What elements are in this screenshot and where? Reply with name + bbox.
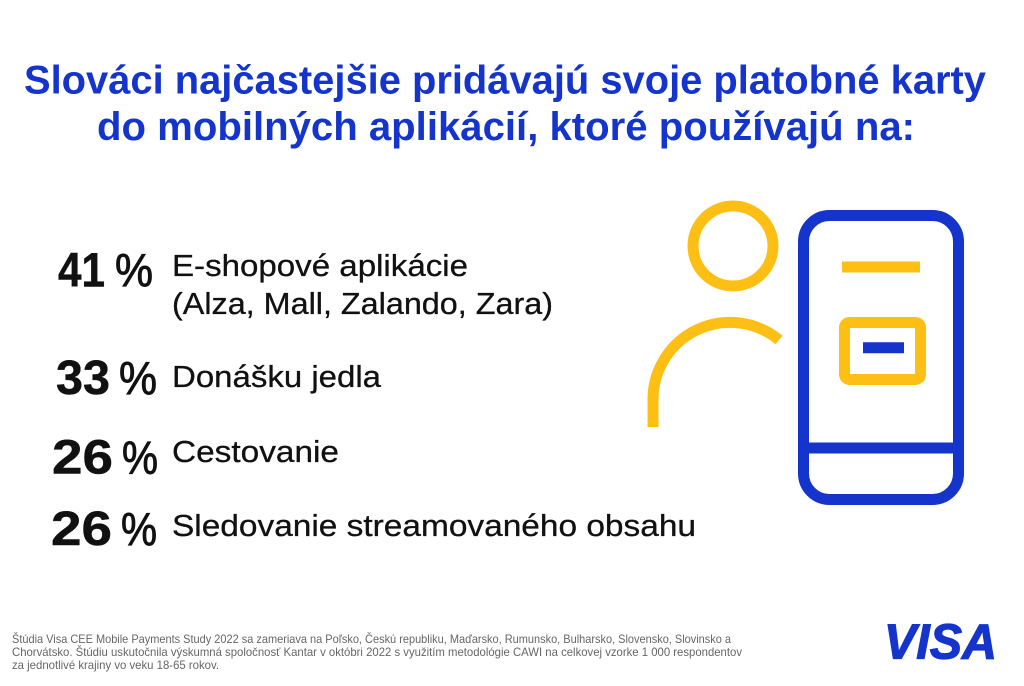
stat: 26 % streaming: Sledovanie streamovaného obsahu xyxy=(172,508,696,543)
stat: 26 % travel: % xyxy=(122,432,158,484)
footnote: za jednotlivé krajiny vo veku 18-65 rokov. xyxy=(12,658,219,672)
icon: person xyxy=(653,206,779,427)
icon: phone with card xyxy=(804,216,958,500)
stat: 26 % streaming: 26 xyxy=(51,502,112,556)
footnote: Štúdia Visa CEE Mobile Payments Study 2022 sa zameriava na Poľsko, Českú republiku, Maďarsko, Rumunsko, Bulharsko, Slovensko, Slovinsko a xyxy=(12,631,731,646)
stat: 41 % e-shop apps xyxy=(58,244,553,321)
stat: 41 % e-shop apps: E-shopové aplikácie xyxy=(172,248,468,283)
stat: 26 % travel: Cestovanie xyxy=(172,434,339,469)
stat: 33 % food delivery: 33 xyxy=(56,351,110,405)
logo: Visa: VISA xyxy=(884,616,997,670)
title xyxy=(24,58,986,149)
stat: 26 % travel xyxy=(52,430,339,484)
stat: 41 % e-shop apps: (Alza, Mall, Zalando, Zara) xyxy=(172,286,553,321)
stat: 26 % travel: 26 xyxy=(52,430,113,484)
stat: 41 % e-shop apps: 41 xyxy=(58,244,105,298)
stat: 33 % food delivery xyxy=(56,351,382,405)
stat: 33 % food delivery: Donášku jedla xyxy=(172,359,382,394)
stat: 26 % streaming: % xyxy=(121,503,157,555)
title: Slováci najčastejšie pridávajú svoje platobné karty xyxy=(24,58,986,102)
stat: 41 % e-shop apps: % xyxy=(115,244,153,296)
stat: 33 % food delivery: % xyxy=(119,352,157,404)
footnote: Chorvátsko. Štúdiu uskutočnila výskumná spoločnosť Kantar v októbri 2022 s využitím metodológie CAWI na celkovej vzorke 1 000 respondentov xyxy=(12,644,742,659)
stat: 26 % streaming xyxy=(51,502,696,556)
footnote xyxy=(12,631,742,672)
title: do mobilných aplikácií, ktoré používajú na: xyxy=(97,105,915,149)
